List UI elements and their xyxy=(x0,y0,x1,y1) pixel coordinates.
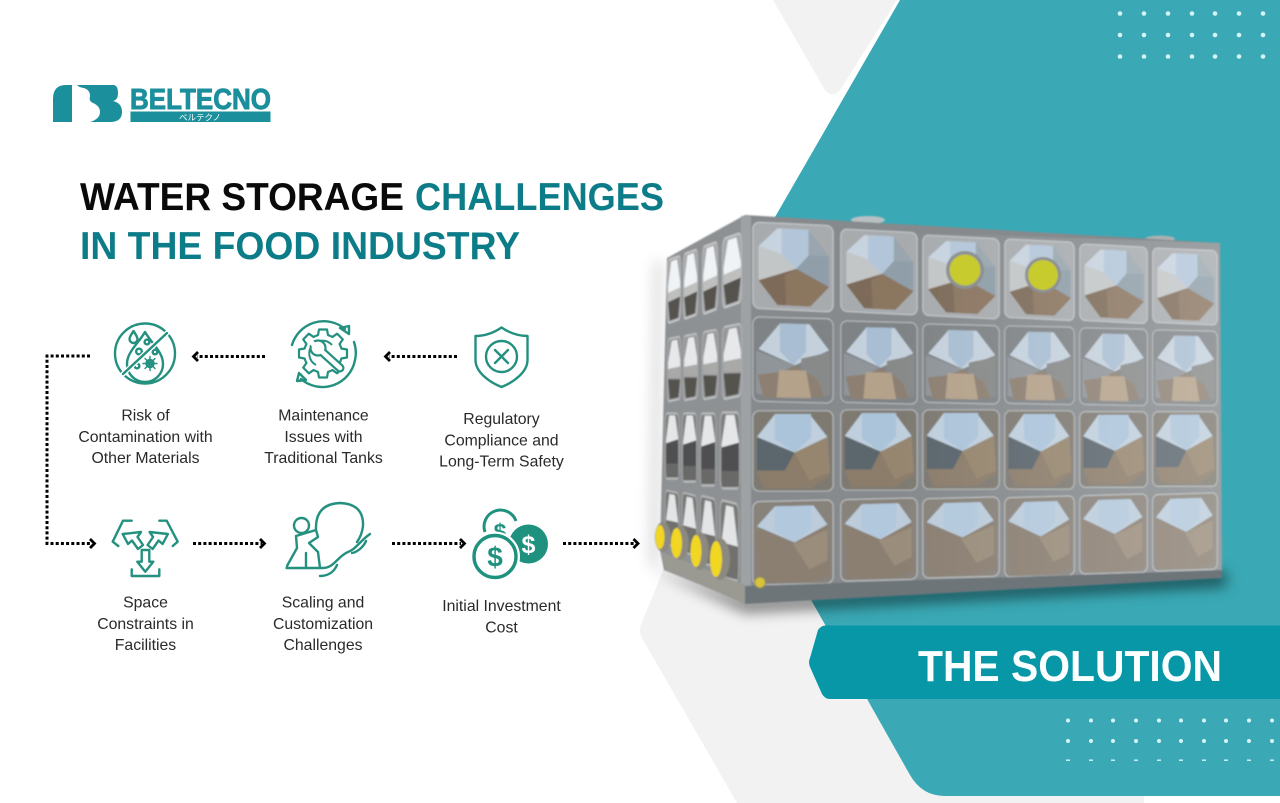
front panels xyxy=(753,222,1217,585)
logo mark xyxy=(53,85,122,122)
background shape: top grey triangle xyxy=(773,0,897,94)
tank front base xyxy=(745,570,1222,604)
icon: space constraints xyxy=(113,521,178,576)
label: regulatory compliance: Long-Term Safety xyxy=(439,454,564,470)
label: risk of contamination: Other Materials xyxy=(92,450,200,467)
label: space constraints: Constraints in xyxy=(97,616,194,633)
title xyxy=(80,176,664,268)
arrow: space to scaling xyxy=(193,539,264,548)
dots: top right xyxy=(1118,11,1265,59)
icon: dollar coins: $ xyxy=(494,519,507,545)
tank side wall xyxy=(660,215,745,603)
label: space constraints xyxy=(97,594,194,654)
arrow: connector from contamination to space xyxy=(47,356,94,548)
steel water tank xyxy=(655,215,1222,604)
background shape: teal hexagon xyxy=(684,0,1280,796)
label: maintenance issues xyxy=(264,408,383,467)
label: scaling and customization: Challenges xyxy=(283,637,363,654)
icon: back coin xyxy=(484,510,516,532)
label: maintenance issues: Traditional Tanks xyxy=(264,450,383,467)
banner: the solution xyxy=(809,626,1280,699)
title: line 1 black: WATER STORAGE xyxy=(80,176,404,219)
yellow flanges on the front xyxy=(946,251,1061,293)
tank lighter right side xyxy=(900,232,1222,594)
icon: dollar coins: $ xyxy=(522,531,536,559)
logo: Beltecno xyxy=(53,84,271,122)
label: risk of contamination: Risk of xyxy=(121,408,170,424)
label: space constraints: Facilities xyxy=(115,637,176,654)
background shape: lower grey hexagon xyxy=(640,505,1144,803)
label: regulatory compliance: Compliance and xyxy=(444,432,559,450)
tank side base xyxy=(661,552,745,604)
arrow: maintenance to contamination xyxy=(194,352,265,361)
icon: shield with cross xyxy=(476,328,528,387)
tank shadow xyxy=(650,262,1226,612)
label: regulatory compliance: Regulatory xyxy=(463,411,540,428)
arrow: investment to solution xyxy=(563,539,638,548)
label: scaling and customization: Customization xyxy=(273,616,373,633)
label: regulatory compliance xyxy=(439,411,564,470)
title: line 1 teal: CHALLENGES xyxy=(415,176,664,219)
logo katakana: ベルテクノ xyxy=(179,112,221,122)
small yellow plug xyxy=(754,577,766,588)
label: space constraints: Space xyxy=(123,594,168,612)
arrow: regulatory to maintenance xyxy=(386,352,457,361)
label: initial investment: Cost xyxy=(485,620,518,636)
icon: maintenance gear and wrench xyxy=(292,321,356,387)
icon: no contamination drop xyxy=(115,324,175,384)
label: scaling and customization xyxy=(273,594,373,654)
logo wordmark: BELTECNO xyxy=(130,84,271,116)
icon: solid coin xyxy=(509,524,548,564)
side panels xyxy=(665,233,742,581)
label: risk of contamination: Contamination with xyxy=(78,429,213,446)
banner text: THE SOLUTION xyxy=(918,642,1222,691)
tank nozzles on top xyxy=(851,216,1175,242)
label: initial investment: Initial Investment xyxy=(442,598,561,615)
banner shape xyxy=(809,626,1280,699)
icon: person pushing boulder xyxy=(286,503,370,576)
dots: bottom right xyxy=(1066,718,1274,761)
title: line 2 teal: IN THE FOOD INDUSTRY xyxy=(80,225,520,268)
label: scaling and customization: Scaling and xyxy=(282,594,364,612)
tank front wall xyxy=(745,215,1222,603)
label: risk of contamination xyxy=(78,408,213,467)
icon: dollar coins xyxy=(470,510,548,582)
logo bar xyxy=(130,112,270,122)
arrow: scaling to investment xyxy=(392,539,464,548)
label: maintenance issues: Maintenance xyxy=(278,408,369,424)
label: initial investment xyxy=(442,598,561,636)
label: maintenance issues: Issues with xyxy=(284,429,363,446)
icon: dollar coins: $ xyxy=(487,542,503,572)
yellow flanges on the side xyxy=(655,522,730,580)
icon: front coin xyxy=(470,532,520,582)
tank corner post xyxy=(741,216,751,603)
